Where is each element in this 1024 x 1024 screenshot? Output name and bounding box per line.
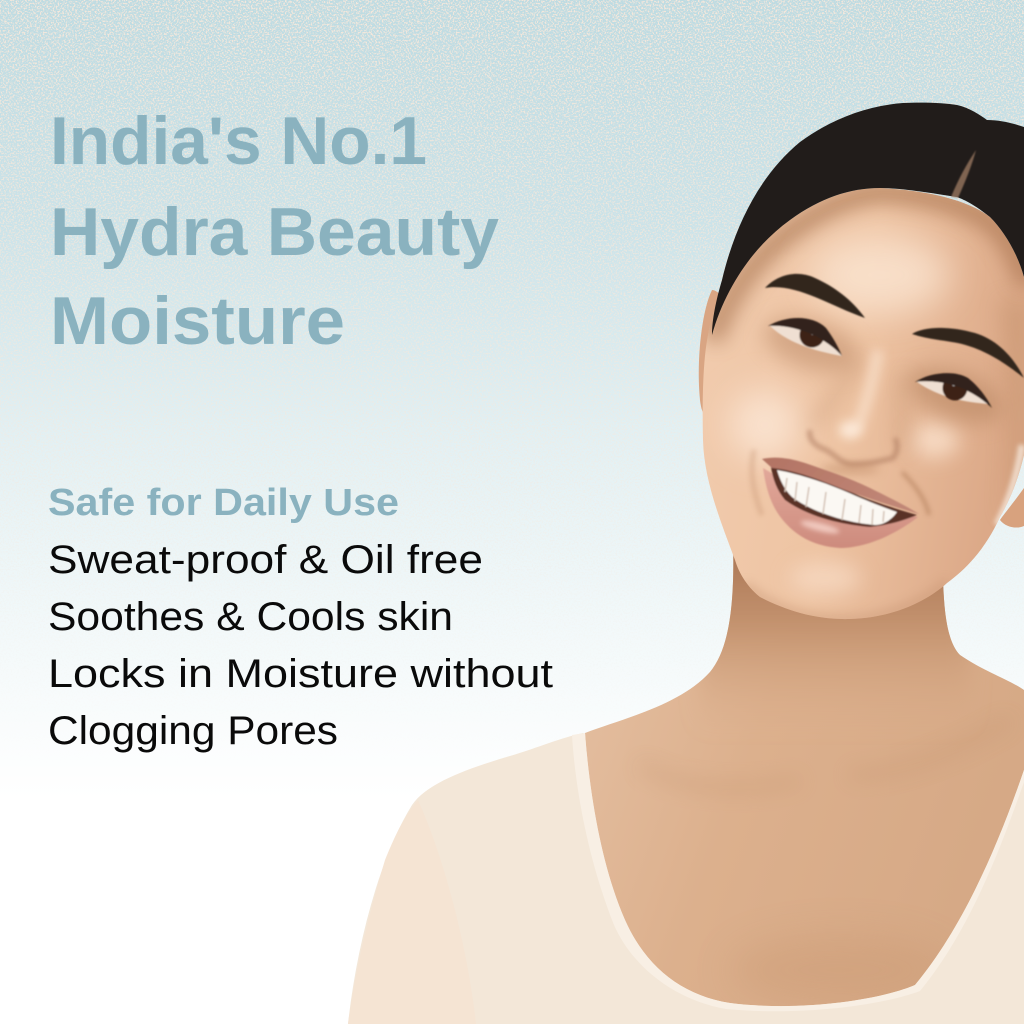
garment sleeve panel <box>348 800 476 1024</box>
left eye <box>768 318 842 356</box>
nose under shadow <box>820 464 880 474</box>
garment: cream top <box>348 733 1024 1024</box>
title: Hydra Beauty <box>50 194 499 270</box>
right cheek highlight <box>911 422 959 458</box>
right face rim shade <box>1002 303 1024 484</box>
title <box>50 103 499 359</box>
lip highlight <box>800 518 840 536</box>
portrait of smiling woman <box>348 103 1024 1024</box>
left cheek highlight <box>729 389 801 461</box>
forehead highlight <box>810 235 950 315</box>
neck shadow under chin <box>699 555 972 688</box>
tooth separations <box>785 478 884 525</box>
smile <box>762 458 919 548</box>
jaw shade <box>745 582 947 619</box>
lower lip <box>763 468 918 548</box>
smile crease right <box>902 472 929 515</box>
title: India's No.1 <box>50 103 427 179</box>
benefits list: Locks in Moisture without <box>48 652 553 696</box>
nose side shade <box>814 376 910 440</box>
left eye socket shade <box>760 311 863 378</box>
neckline edge <box>572 733 1024 1011</box>
right eye socket shade <box>904 360 1002 428</box>
collarbone shading <box>640 720 1010 788</box>
title: Moisture <box>50 283 345 359</box>
chest lower shading <box>762 950 895 989</box>
face <box>690 170 1024 630</box>
nose tip highlight <box>839 421 861 439</box>
hairline shadow <box>712 192 1024 340</box>
teeth <box>777 470 897 525</box>
background gradient <box>0 0 1024 702</box>
benefits list: Clogging Pores <box>48 709 338 753</box>
right eyebrow <box>912 328 1024 378</box>
hair <box>712 103 1024 335</box>
chin highlight <box>789 562 861 594</box>
right rim light <box>997 445 1022 525</box>
nose bridge highlight <box>856 350 878 432</box>
benefits list <box>48 538 553 753</box>
neck and chest skin <box>585 555 1024 1006</box>
right eye <box>915 373 992 408</box>
left eyebrow <box>765 274 865 318</box>
hair part <box>951 150 976 198</box>
ear <box>699 290 728 416</box>
benefits list: Soothes & Cools skin <box>48 595 453 639</box>
smile crease left <box>752 450 762 515</box>
upper lip <box>762 458 919 514</box>
nose shadow <box>810 430 897 464</box>
mouth interior <box>771 467 917 527</box>
far ear <box>1000 488 1024 528</box>
benefits list: Sweat-proof & Oil free <box>48 538 483 582</box>
subheading: Safe for Daily Use <box>48 482 399 524</box>
